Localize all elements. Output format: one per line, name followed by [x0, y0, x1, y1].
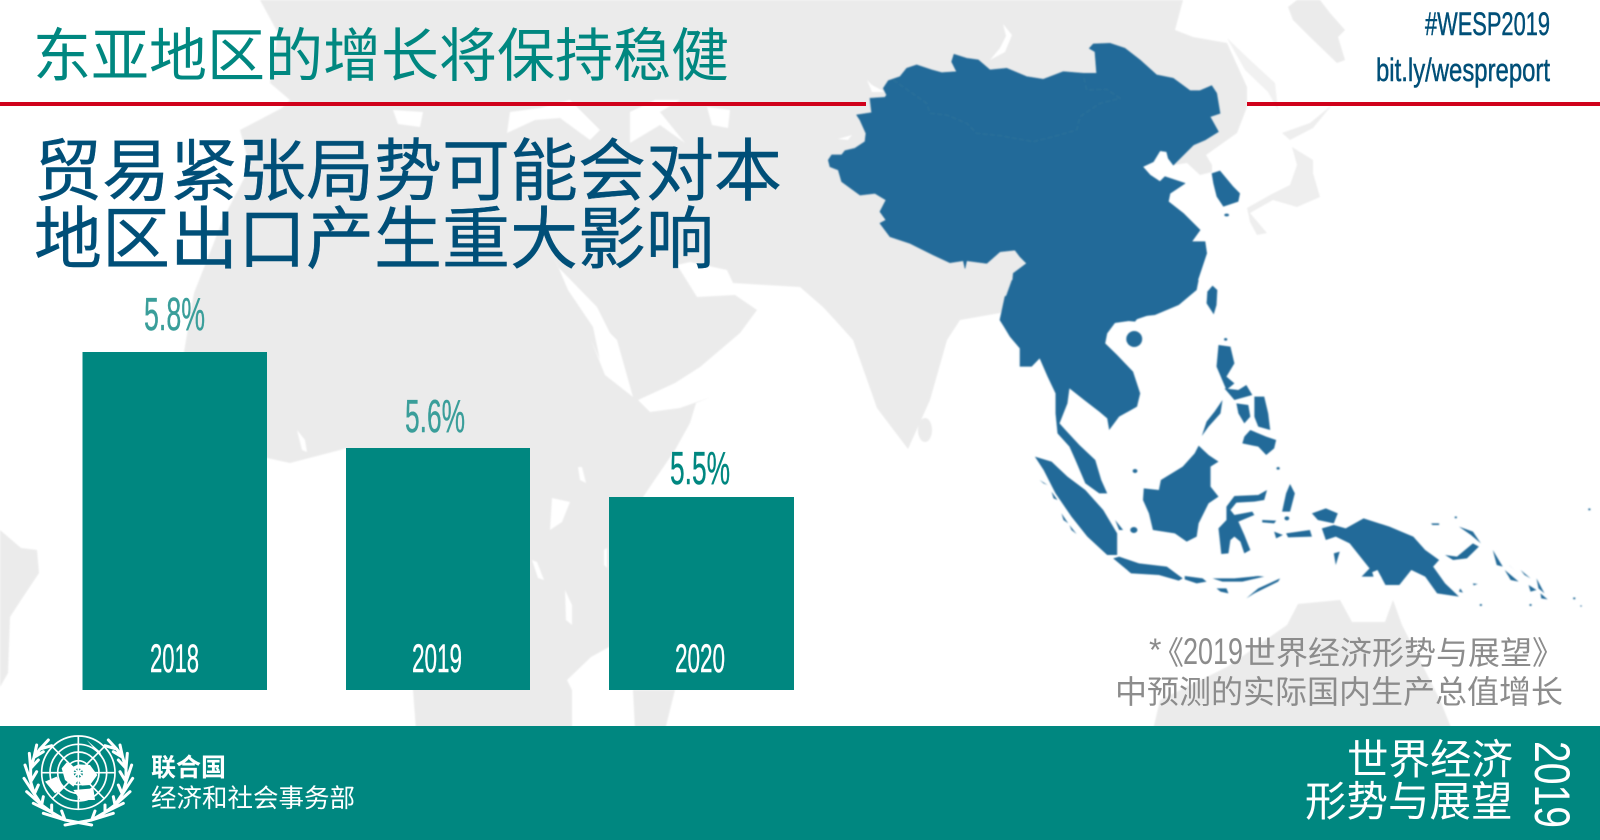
organisation name: 经济和社会事务部 [151, 778, 355, 815]
organisation name: 联合国 [151, 748, 226, 784]
report name: 形势与展望 [1305, 768, 1513, 828]
footer band [0, 726, 1600, 840]
laurel right [65, 740, 133, 825]
globe continents [45, 740, 103, 800]
footnote: 中预测的实际国内生产总值增长 [1115, 667, 1563, 713]
footnote [1115, 628, 1564, 713]
laurel left [24, 740, 92, 825]
globe grid [42, 736, 115, 809]
bar 2018 [82, 288, 267, 690]
highlighted East Asia region map [828, 43, 1591, 607]
footnote: 世界经济形势与展望》 [1244, 628, 1564, 674]
bar 2018: 2018 [150, 637, 199, 681]
bar 2018: 5.8% [144, 288, 205, 340]
organisation name [151, 748, 355, 815]
footnote: 《 [1152, 628, 1184, 674]
bar 2019: 5.6% [405, 390, 465, 442]
headline [34, 116, 782, 283]
bar 2020: 5.5% [670, 442, 730, 494]
red rule, right [1247, 102, 1600, 106]
report name [1305, 726, 1513, 828]
Southeast Asia and Pacific islands [1000, 280, 1591, 607]
red rule, left [0, 102, 866, 106]
bar 2019: 2019 [412, 637, 462, 681]
water bodies cut into the map [297, 24, 1012, 625]
bar 2019 [346, 390, 530, 690]
footnote: * [1149, 632, 1161, 668]
title: 东亚地区的增长将保持稳健 [33, 9, 729, 93]
icon: UN emblem [24, 736, 133, 825]
report name: 世界经济 [1347, 726, 1513, 786]
headline: 地区出口产生重大影响 [34, 184, 714, 283]
bar 2020: 2020 [675, 637, 725, 681]
bar chart: GDP growth [82, 288, 794, 690]
China, Mongolia and Korea [828, 43, 1240, 340]
hashtag and report link [1376, 6, 1550, 88]
background world map in light grey [0, 0, 1452, 730]
headline: 贸易紧张局势可能会对本 [34, 116, 782, 215]
bar 2020 [609, 442, 794, 690]
footnote: 2019 [1183, 631, 1243, 672]
